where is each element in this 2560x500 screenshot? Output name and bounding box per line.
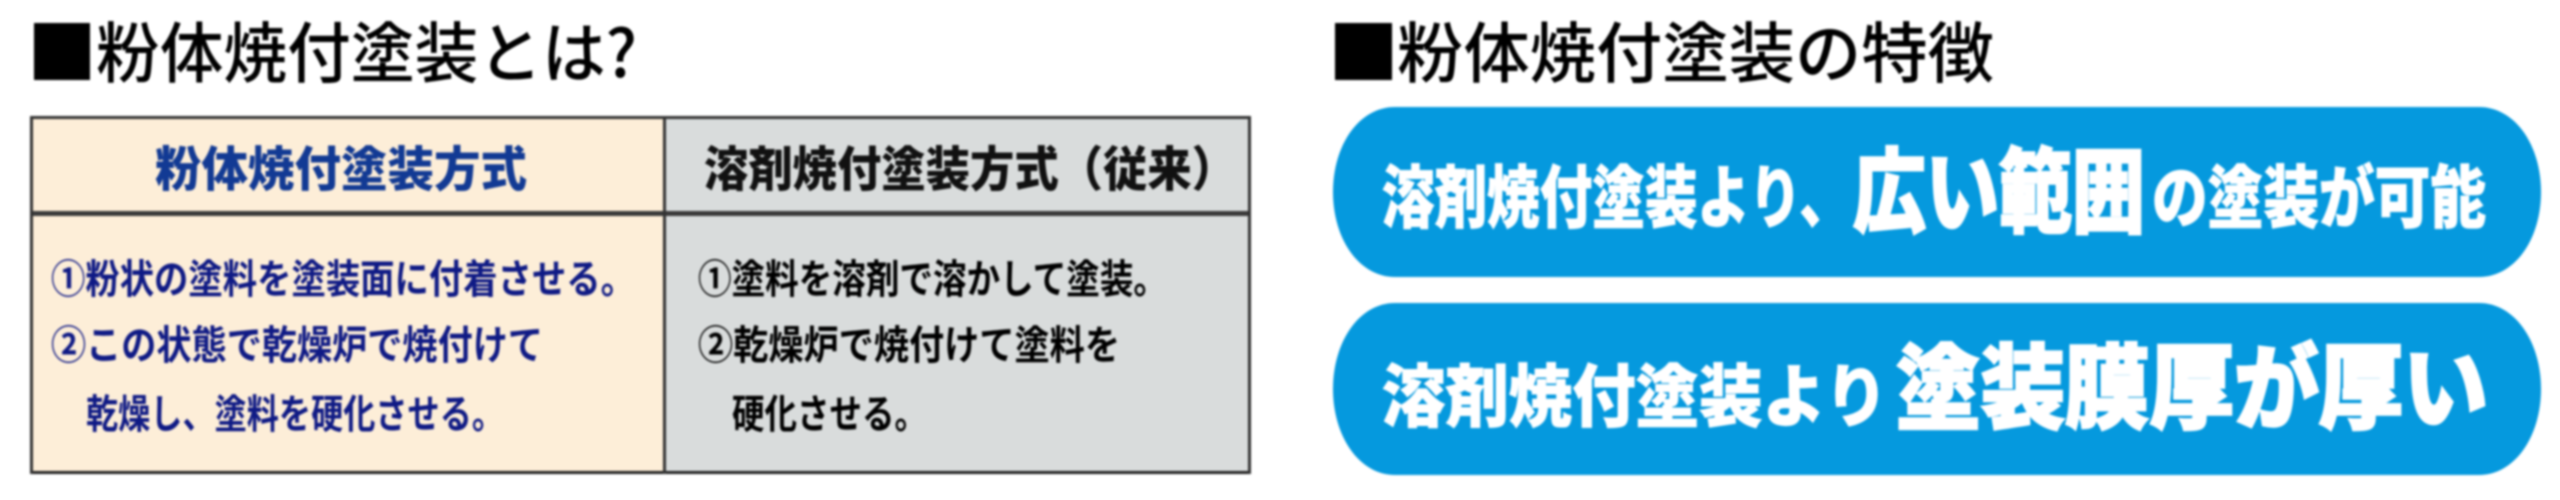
text block: powder coating steps: ②この状態で乾燥炉で焼付けて: [51, 313, 543, 371]
text block: solvent coating steps: ①塗料を溶剤で溶かして塗装。: [698, 247, 1167, 305]
column heading: powder coating method: 粉体焼付塗装方式: [155, 130, 527, 200]
heading: what is powder baking coating: 粉体焼付塗装とは?: [96, 1, 637, 97]
panel: solvent coating column: [664, 118, 1250, 472]
panel: comparison table: [30, 116, 1251, 474]
text block: solvent coating steps: 硬化させる。: [732, 382, 927, 440]
column heading: solvent coating method: 溶剤焼付塗装方式（従来）: [704, 130, 1236, 200]
text block: powder coating steps: 乾燥し、塗料を硬化させる。: [86, 382, 504, 440]
text block: solvent coating steps: [698, 247, 1167, 440]
callout: wider coating range: の塗装が可能: [2152, 143, 2486, 242]
callout: thicker coating film: 塗装膜厚が厚い: [1896, 315, 2488, 448]
text block: solvent coating steps: ②乾燥炉で焼付けて塗料を: [698, 313, 1120, 371]
heading: features of powder baking coating: 粉体焼付塗装の特徴: [1397, 1, 1994, 97]
callout: wider coating range: [1333, 107, 2541, 277]
callout: wider coating range: 広い範囲: [1853, 119, 2145, 252]
callout: thicker coating film: [1333, 303, 2541, 475]
text block: powder coating steps: ①粉状の塗料を塗装面に付着させる。: [51, 247, 635, 305]
callout: thicker coating film: 溶剤焼付塗装より: [1382, 342, 1888, 441]
callout: wider coating range: 溶剤焼付塗装より、: [1382, 143, 1852, 242]
text block: powder coating steps: [51, 247, 635, 440]
panel: powder coating column: [31, 118, 664, 472]
